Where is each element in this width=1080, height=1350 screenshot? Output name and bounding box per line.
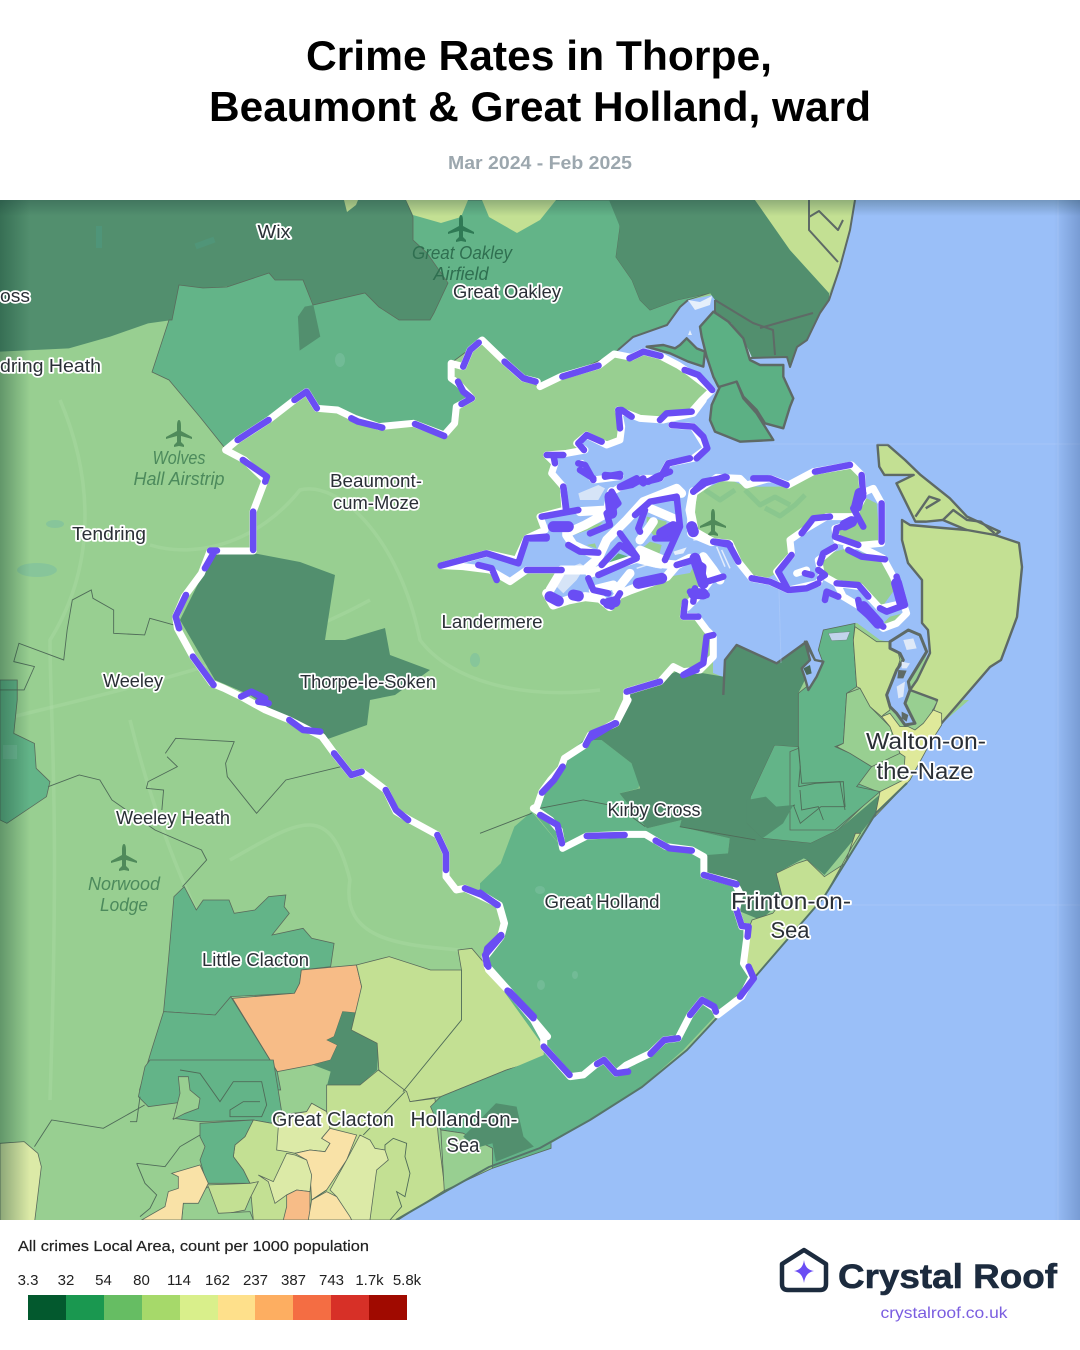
Little Clacton district (164, 887, 334, 1015)
place label: Great Oakley: Great Oakley (453, 282, 561, 302)
Yellow-green east Clacton district (351, 948, 548, 1102)
Walton backwater wedge (905, 692, 937, 730)
place label: Walton-on-the-Naze (866, 728, 986, 784)
Clacton yellow-green central (233, 1070, 445, 1220)
Orange high-crime district (232, 965, 362, 1072)
Lower Clacton district (139, 997, 281, 1090)
purple creek blobs (550, 497, 703, 603)
Great Oakley district (152, 200, 710, 447)
airplane icon: Wolves Hall Airstrip (166, 420, 192, 447)
legend scale labels: 162 (205, 1272, 230, 1289)
place label: Tendring Heath: dring Heath (0, 356, 101, 376)
legend scale labels (18, 1272, 422, 1289)
ponds (3, 226, 578, 990)
airfield label: Wolves Hall Airstrip: Wolves (152, 448, 206, 468)
Walton thin boundaries (790, 747, 845, 820)
icon: house with star (782, 1250, 826, 1290)
legend scale labels: 743 (319, 1272, 344, 1289)
place label: Cross: oss (0, 286, 30, 306)
legend scale labels: 387 (281, 1272, 306, 1289)
airfield label: Great Oakley: Great Oakley (412, 243, 513, 263)
title: Beaumont & Great Holland, ward (209, 83, 871, 130)
place label: Thorpe-le-Soken: Thorpe-le-Soken (300, 672, 436, 692)
Clacton yellow-green south-west (207, 1182, 258, 1215)
legend scale labels: 114 (167, 1272, 191, 1289)
Walton light-green (837, 688, 900, 767)
Clacton light patch (173, 1077, 200, 1119)
legend title: All crimes Local Area, count per 1000 population (18, 1238, 369, 1255)
map labels (0, 222, 986, 1157)
Clacton mid-green west (138, 1060, 282, 1123)
airfield label: Great Oakley: Airfield (433, 264, 489, 284)
map panel (0, 200, 1080, 1223)
Crystal Roof logo (782, 1250, 1058, 1322)
Clacton thin boundaries (130, 1092, 410, 1220)
Walton area districts (790, 623, 942, 830)
Clacton pale-orange west (142, 1165, 208, 1220)
Estuary shoreline outline (723, 642, 813, 695)
logo wordmark: Crystal Roof (838, 1258, 1058, 1296)
Great Holland district (480, 812, 756, 1153)
logo url: crystalroof.co.uk (880, 1305, 1009, 1322)
Horsey Island and eastern islets (692, 468, 903, 623)
place label: Beaumont-cum-Moze (330, 471, 422, 513)
Walton east mid-green district (747, 697, 878, 843)
Clacton orange south (283, 1190, 310, 1220)
purple east blobs (845, 493, 902, 623)
Clacton light-green south-west (182, 1187, 253, 1220)
place label: Holland-on-Sea: Sea (446, 1135, 480, 1157)
place label: Weeley: Weeley (103, 671, 163, 691)
place label: Landermere: Landermere (442, 612, 542, 632)
legend (18, 1238, 422, 1320)
Naze spit (878, 445, 1000, 535)
legend scale labels: 80 (133, 1272, 150, 1289)
Skipper's island and saltings (647, 312, 793, 442)
legend colour ramp (28, 1295, 407, 1320)
place label: Holland-on-Sea (410, 1109, 518, 1157)
place label: Holland-on-Sea: Holland-on- (410, 1109, 518, 1131)
Estuary south-bank dark district (590, 642, 813, 740)
legend scale labels: 54 (95, 1272, 112, 1289)
Holland-on-Sea mid-green district (431, 1057, 551, 1168)
coast and marsh outlines north (618, 200, 855, 367)
airplane icon: Great Oakley Airfield (448, 215, 474, 242)
Kirby dark district (597, 697, 881, 920)
airplane icon: Norwood Lodge (111, 844, 137, 871)
place label: Great Holland: Great Holland (544, 892, 660, 912)
white creek network (547, 488, 720, 607)
Thin ward boundaries (0, 590, 845, 1147)
legend scale labels: 32 (58, 1272, 74, 1289)
place label: Little Clacton: Little Clacton (202, 950, 309, 970)
Kirby Cross mid-green district (532, 733, 730, 857)
legend scale labels: 1.7k (355, 1272, 384, 1289)
Clacton pale-orange south (308, 1192, 352, 1220)
place label: Kirby Cross: Kirby Cross (608, 800, 700, 820)
South Clacton districts (130, 1060, 445, 1220)
Dark Clacton district (313, 1012, 379, 1087)
purple creek network (530, 470, 730, 617)
place label: Great Clacton: Great Clacton (272, 1109, 394, 1131)
Clacton mid-green lower (200, 1120, 253, 1183)
place label: Frinton-on-Sea: Sea (770, 917, 810, 943)
West mid-green district (0, 680, 50, 823)
airfield label: Great Oakley (412, 243, 513, 284)
Clacton pale centre (277, 1103, 330, 1153)
light creek beside Skipper's Island (716, 313, 751, 357)
place label: Beaumont-cum-Moze: cum-Moze (333, 493, 419, 513)
top yellow patches (344, 200, 556, 233)
place label: Walton-on-the-Naze: the-Naze (876, 758, 974, 784)
Holland-on-Sea light-green district (441, 1130, 492, 1191)
legend scale labels: 3.3 (18, 1272, 38, 1289)
roads on light land (0, 212, 600, 1100)
Thorpe-le-Soken dark district (180, 553, 430, 740)
legend scale labels: 5.8k (393, 1272, 422, 1289)
small dark patch (298, 305, 320, 351)
place label: Walton-on-the-Naze: Walton-on- (866, 728, 986, 754)
sea (399, 200, 1080, 1220)
Frinton yellow-green district (745, 833, 861, 977)
Walton backwater islets (897, 670, 908, 722)
airfield label: Norwood Lodge (88, 874, 161, 915)
place label: Frinton-on-Sea (731, 888, 851, 943)
airplane icon: Horsey Island (700, 509, 726, 536)
title: Crime Rates in Thorpe, (306, 32, 772, 79)
Walton backwater marsh (897, 638, 917, 698)
north-east coastal district (755, 200, 855, 293)
Dark blob in Kirby (747, 797, 793, 838)
title (209, 32, 871, 130)
airfield label: Norwood Lodge: Lodge (100, 895, 148, 915)
place label: Wix: Wix (258, 222, 290, 242)
airfield label: Wolves Hall Airstrip (134, 448, 224, 489)
subtitle: date range: Mar 2024 - Feb 2025 (448, 153, 632, 173)
place label: Beaumont-cum-Moze: Beaumont- (330, 471, 422, 491)
Walton pale coastal strip (875, 710, 942, 817)
Clacton pale east (330, 1135, 388, 1220)
north-east dark district (609, 200, 829, 367)
creek islets and saltmarsh (555, 485, 730, 593)
Walton mid-green (790, 623, 880, 830)
airfield label: Wolves Hall Airstrip: Hall Airstrip (134, 469, 224, 489)
Hamford Water marsh flecks (688, 296, 712, 335)
ward boundary: white base line (176, 340, 907, 1077)
legend scale labels: 237 (243, 1272, 268, 1289)
Clacton pale-orange centre (295, 1128, 357, 1200)
map edge vignette (0, 200, 1080, 1220)
Far south-west pale district (0, 1142, 41, 1223)
Walton yellow-green west (853, 627, 900, 717)
coastline edge (396, 783, 907, 1220)
Walton backwater (887, 630, 927, 725)
Naze main body (902, 520, 1022, 725)
ward boundary: purple dashes (176, 343, 905, 1075)
Walton tidal inlet (802, 642, 823, 690)
north dark district (0, 200, 448, 352)
place label: Tendring: Tendring (72, 524, 146, 544)
Horsey Island marsh (705, 490, 805, 516)
mainland base (0, 200, 969, 1220)
place label: Frinton-on-Sea: Frinton-on- (731, 888, 851, 914)
Clacton pale south (258, 1153, 312, 1203)
Holland-on-Sea dark patch (463, 1103, 534, 1162)
tile seams (770, 200, 1080, 1220)
Walton marina stripes (828, 632, 850, 641)
Walton inlet islet (803, 665, 812, 675)
place label: Weeley Heath: Weeley Heath (116, 808, 230, 828)
airfield label: Norwood Lodge: Norwood (88, 874, 161, 894)
